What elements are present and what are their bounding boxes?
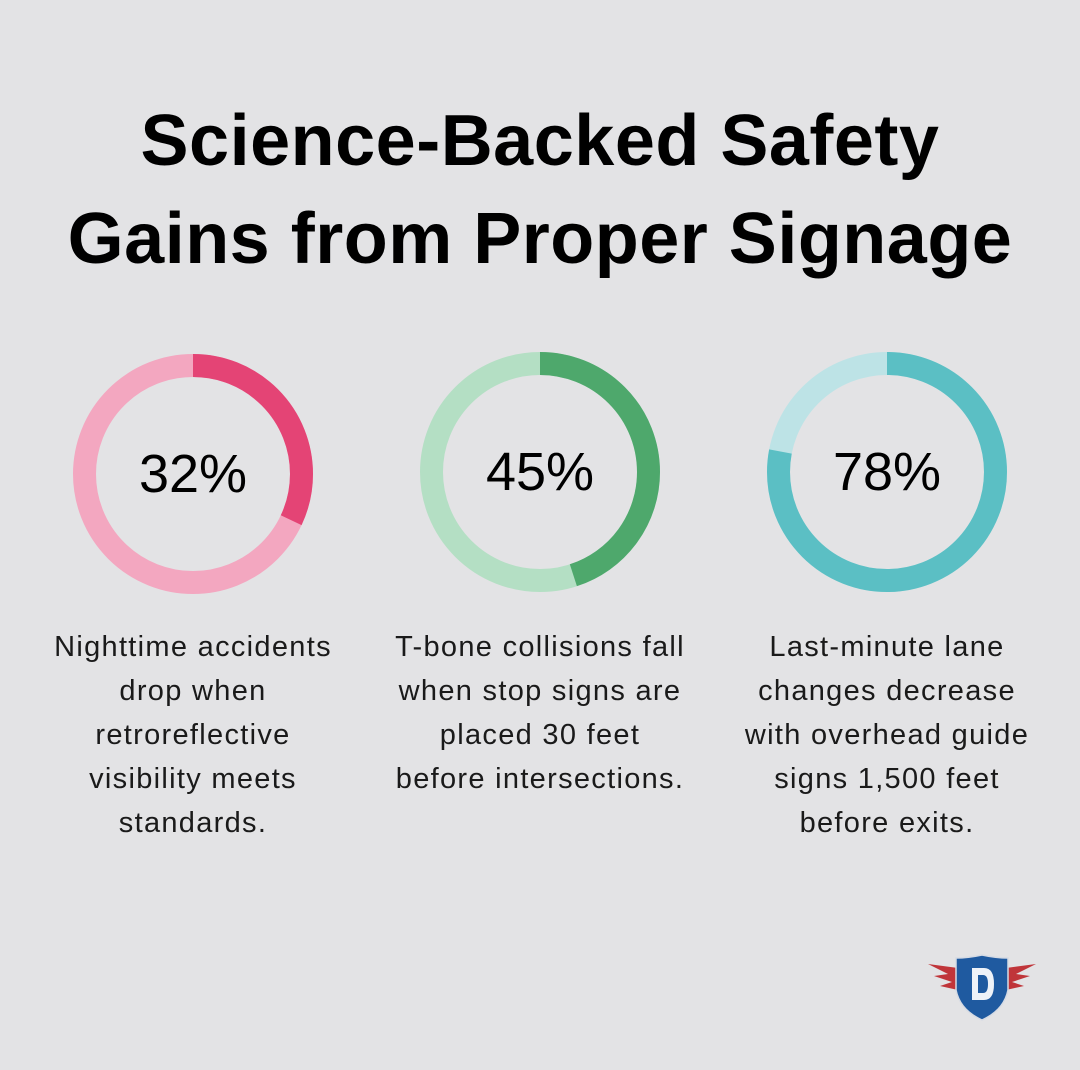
donut: 32%: 32% xyxy=(139,444,247,504)
donut: 78%: 78% xyxy=(833,442,941,502)
text: nighttime accidents: Nighttime accidents xyxy=(54,631,332,663)
text: lane changes: signs 1,500 feet xyxy=(774,763,1000,795)
text: T-bone collisions: placed 30 feet xyxy=(440,719,640,751)
donut: 32% xyxy=(84,366,302,582)
title: Science-Backed Safety xyxy=(141,101,939,181)
text: T-bone collisions: before intersections. xyxy=(396,763,684,795)
text: nighttime accidents: drop when xyxy=(119,675,267,707)
text: lane changes: Last-minute lane xyxy=(769,631,1005,663)
text: lane changes: with overhead guide xyxy=(745,719,1029,751)
donut: 78% xyxy=(778,364,996,580)
donut: 45% xyxy=(432,364,648,580)
text: nighttime accidents: standards. xyxy=(119,807,267,839)
donut: 45%: 45% xyxy=(486,442,594,502)
text: nighttime accidents: visibility meets xyxy=(89,763,297,795)
title xyxy=(68,101,1012,279)
text: nighttime accidents: retroreflective xyxy=(95,719,291,751)
text: lane changes: before exits. xyxy=(800,807,974,839)
text: lane changes xyxy=(744,631,1029,839)
icon: logo shield with wings xyxy=(928,955,1036,1020)
title: Gains from Proper Signage xyxy=(68,199,1012,279)
text: T-bone collisions: T-bone collisions fall xyxy=(395,631,685,663)
text: lane changes: changes decrease xyxy=(758,675,1016,707)
text: T-bone collisions: when stop signs are xyxy=(399,675,681,707)
text: T-bone collisions xyxy=(395,631,685,795)
text: nighttime accidents xyxy=(54,631,332,839)
